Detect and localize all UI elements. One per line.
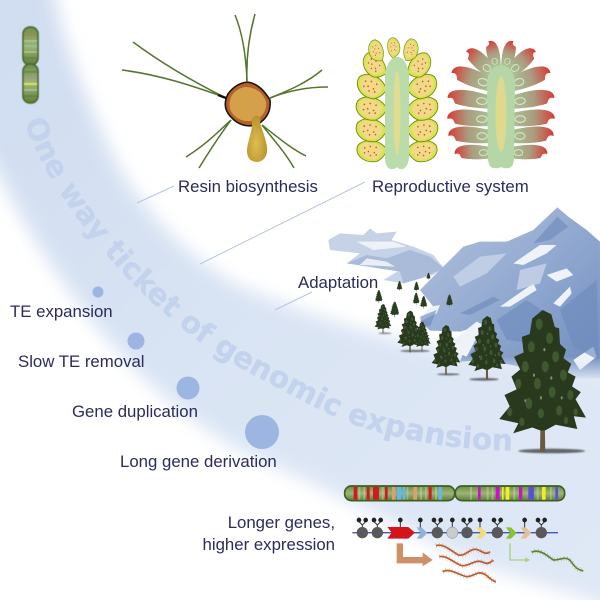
label: Longer genes, higher expression: Longer genes,: [228, 513, 335, 532]
illustration: row of conifer trees: [375, 273, 586, 453]
curved title: One way ticket of genomic expansion: One way ticket of genomic expansion: [27, 118, 511, 451]
icon: red ovulate cone: [447, 39, 555, 168]
chromosome bar with coloured bands: [345, 486, 565, 501]
label: Resin biosynthesis: Resin biosynthesis: [178, 177, 318, 196]
label: Slow TE removal: Slow TE removal: [18, 352, 145, 371]
icon: green pollen cone: [355, 37, 439, 169]
label: Longer genes, higher expression: higher expression: [203, 535, 335, 554]
gene model: exons, methylation lollipops and transcripts: [352, 518, 583, 582]
icon: resin duct with needles and drop: [122, 14, 328, 168]
label: Longer genes, higher expression: [203, 513, 335, 554]
label: Reproductive system: Reproductive system: [372, 177, 529, 196]
label: Gene duplication: Gene duplication: [72, 402, 198, 421]
illustration: snowy mountains: [328, 207, 600, 380]
leader lines: [137, 182, 365, 310]
label: TE expansion: TE expansion: [10, 302, 113, 321]
label: Long gene derivation: Long gene derivation: [120, 452, 277, 471]
icon: chromosome top left: [23, 27, 38, 103]
bubbles: expansion mechanisms: [92, 286, 279, 449]
label: Adaptation: Adaptation: [298, 273, 378, 292]
